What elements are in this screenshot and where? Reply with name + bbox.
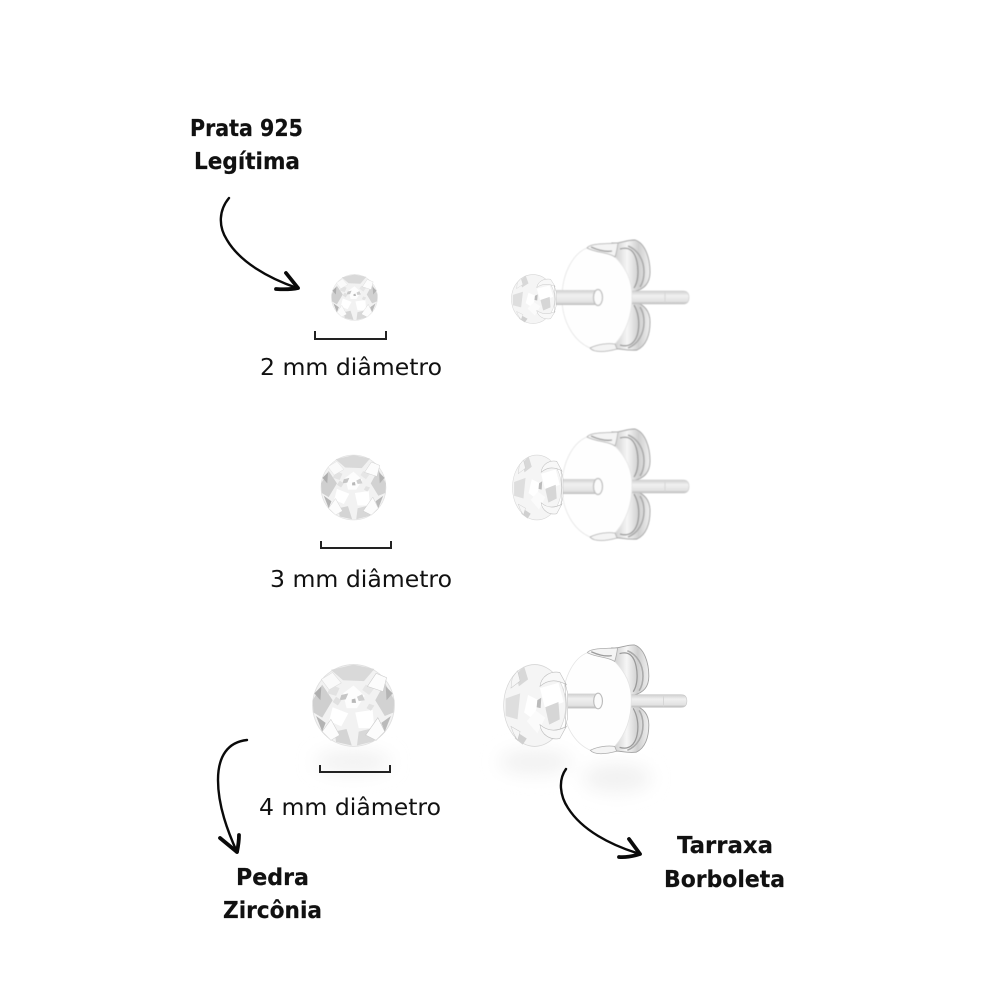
heading: Prata 925 Legítima: [190, 116, 303, 175]
shadows under 4 mm earring: [315, 750, 651, 792]
icon: 2 mm butterfly back: [555, 240, 689, 352]
row 1: 2 mm earring: [260, 240, 689, 381]
label: 3 mm diâmetro: 3 mm diâmetro: [270, 567, 452, 593]
arrow: to the butterfly back: [561, 769, 640, 857]
icon: 3 mm side stone: [513, 455, 563, 520]
heading: Tarraxa Borboleta: [664, 833, 785, 893]
bracket: 3 mm: [321, 541, 391, 548]
icon: 3 mm front stone: [321, 455, 386, 520]
icon: 4 mm side stone: [504, 665, 568, 746]
heading: Prata 925 Legítima: Legítima: [194, 149, 300, 175]
icon: 2 mm side stone: [511, 275, 556, 323]
heading: Pedra Zircônia: Zircônia: [223, 898, 322, 924]
arrow: to the silver setting: [221, 198, 298, 289]
icon: 3 mm butterfly back: [555, 429, 689, 540]
heading: Tarraxa Borboleta: Borboleta: [664, 867, 785, 893]
bracket: 2 mm: [315, 331, 386, 339]
row 2: 3 mm earring: [270, 429, 689, 593]
heading: Tarraxa Borboleta: Tarraxa: [677, 833, 773, 859]
icon: 2 mm front stone: [331, 274, 378, 321]
label: 2 mm diâmetro: 2 mm diâmetro: [260, 355, 442, 381]
icon: 4 mm front stone: [313, 665, 394, 746]
heading: Pedra Zircônia: [223, 865, 322, 924]
row 3: 4 mm earring: [259, 645, 687, 821]
heading: Prata 925 Legítima: Prata 925: [190, 116, 303, 142]
label: 4 mm diâmetro: 4 mm diâmetro: [259, 795, 441, 821]
arrow: to the zirconia stone: [218, 740, 247, 852]
icon: 4 mm butterfly back: [556, 645, 687, 754]
heading: Pedra Zircônia: Pedra: [236, 865, 309, 891]
bracket: 4 mm: [320, 765, 390, 772]
